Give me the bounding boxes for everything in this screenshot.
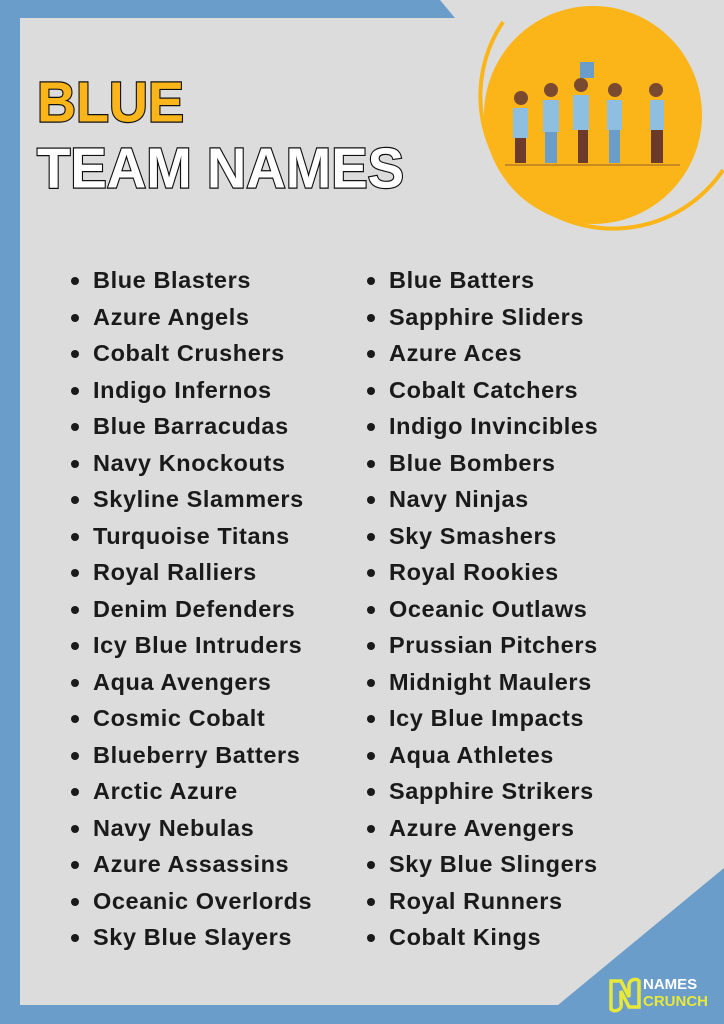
list: right column: Prussian Pitchers (389, 632, 598, 658)
list: right column: Aqua Athletes (389, 742, 554, 768)
list: right column: Sapphire Strikers (389, 778, 594, 804)
logo (609, 976, 708, 1012)
list: right column: Indigo Invincibles (389, 413, 598, 439)
list: right column: Navy Ninjas (389, 486, 529, 512)
list: left column: Turquoise Titans (93, 522, 290, 548)
list: right column: Blue Bombers (389, 450, 556, 476)
list: right column: Sky Blue Slingers (389, 851, 598, 877)
list: right column: Sky Smashers (389, 522, 557, 548)
list: left column: Arctic Azure (93, 778, 238, 804)
list: left column: Indigo Infernos (93, 376, 272, 402)
list: left column: Cobalt Crushers (93, 340, 285, 366)
list: left column: Navy Knockouts (93, 450, 286, 476)
list: left column: Aqua Avengers (93, 668, 271, 694)
list: right column: Royal Runners (389, 888, 563, 914)
list: right column (367, 267, 598, 950)
list: right column: Cobalt Catchers (389, 376, 578, 402)
list: right column: Azure Aces (389, 340, 522, 366)
list: right column: Cobalt Kings (389, 924, 541, 950)
list: left column: Skyline Slammers (93, 486, 304, 512)
list: right column: Midnight Maulers (389, 668, 592, 694)
list: left column: Blueberry Batters (93, 742, 300, 768)
list: left column: Denim Defenders (93, 596, 295, 622)
list: left column: Icy Blue Intruders (93, 632, 302, 658)
list: right column: Oceanic Outlaws (389, 596, 587, 622)
list: left column: Blue Barracudas (93, 413, 289, 439)
list: left column: Azure Angels (93, 304, 250, 330)
logo: NAMES (643, 976, 697, 993)
list: right column: Blue Batters (389, 267, 535, 293)
list: left column (71, 267, 312, 950)
title: BLUE (37, 70, 184, 134)
list: left column: Blue Blasters (93, 267, 251, 293)
list: left column: Cosmic Cobalt (93, 705, 265, 731)
list: left column: Azure Assassins (93, 851, 289, 877)
list: left column: Royal Ralliers (93, 559, 257, 585)
list: right column: Icy Blue Impacts (389, 705, 584, 731)
list: left column: Navy Nebulas (93, 814, 254, 840)
title (36, 70, 404, 200)
list: right column: Sapphire Sliders (389, 304, 584, 330)
logo: CRUNCH (643, 993, 708, 1010)
list: right column: Azure Avengers (389, 814, 575, 840)
list: right column: Royal Rookies (389, 559, 559, 585)
list: left column: Sky Blue Slayers (93, 924, 292, 950)
list: left column: Oceanic Overlords (93, 888, 312, 914)
title: TEAM NAMES (37, 136, 404, 200)
illustration: yellow circle with fans (478, 6, 724, 231)
